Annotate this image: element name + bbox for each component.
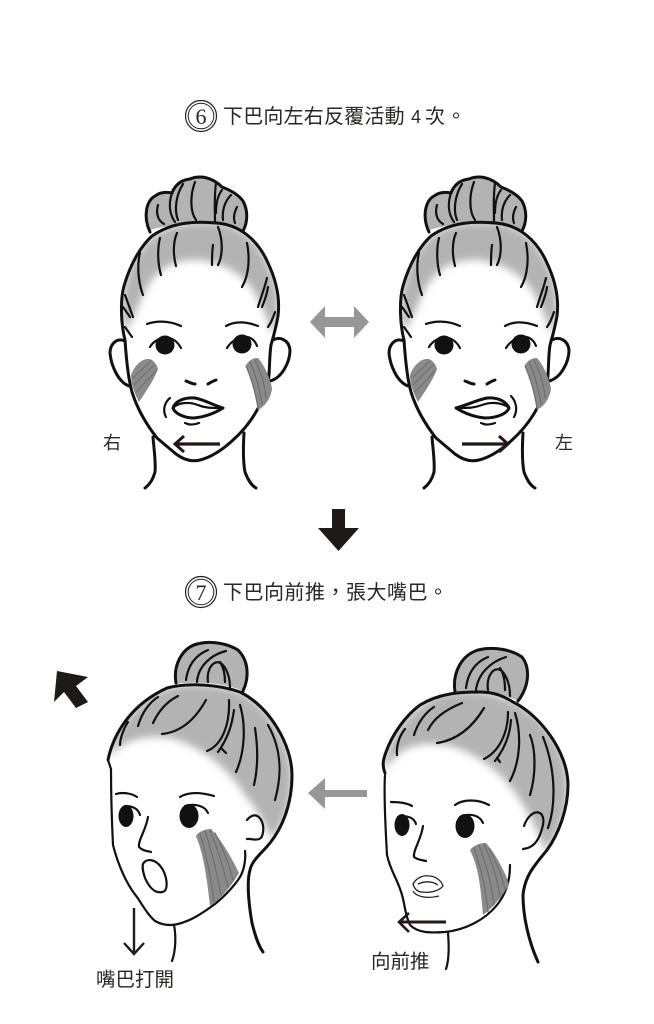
nose xyxy=(139,817,151,852)
number badge 7 xyxy=(186,576,216,608)
step 6 text: 下巴向左右反覆活動 xyxy=(223,105,405,128)
grey left arrow xyxy=(308,778,367,809)
eyes and brows xyxy=(116,793,214,828)
label: left: 左 xyxy=(555,433,573,453)
label: mouth open: 嘴巴打開 xyxy=(96,969,174,991)
mouth xyxy=(164,398,223,424)
down arrow: mouth open xyxy=(124,908,144,954)
side face: jaw forward xyxy=(383,648,568,969)
face: jaw moved left-hand side xyxy=(389,177,569,488)
nose xyxy=(414,826,426,861)
jaw arrow right xyxy=(462,436,508,452)
step 7 text: 下巴向前推，張大嘴巴。 xyxy=(223,581,448,604)
number badge 7: 7 xyxy=(196,580,206,605)
pursed mouth xyxy=(413,876,443,897)
cheek muscle xyxy=(196,829,239,906)
face: jaw moved right-hand side xyxy=(110,177,290,488)
side face: mouth open xyxy=(108,642,292,961)
step 6 text: 。 xyxy=(446,106,466,128)
black down arrow xyxy=(318,509,359,551)
double-headed grey arrow xyxy=(310,306,369,338)
eyes and brows xyxy=(391,800,489,838)
black up-left arrow xyxy=(54,671,88,708)
label: push forward: 向前推 xyxy=(371,951,430,973)
cheek muscle xyxy=(470,843,509,915)
step 6 heading xyxy=(186,100,466,132)
open mouth xyxy=(143,860,167,892)
label: right: 右 xyxy=(103,433,121,453)
jaw arrow left xyxy=(175,436,220,452)
number badge 6 xyxy=(186,100,216,132)
number badge 6: 6 xyxy=(196,104,206,129)
step 7 heading xyxy=(186,576,448,608)
mouth xyxy=(456,396,516,424)
step 6 text: 4 xyxy=(411,107,421,127)
step 6 text: 次 xyxy=(425,105,445,128)
jaw arrow forward xyxy=(399,913,446,932)
